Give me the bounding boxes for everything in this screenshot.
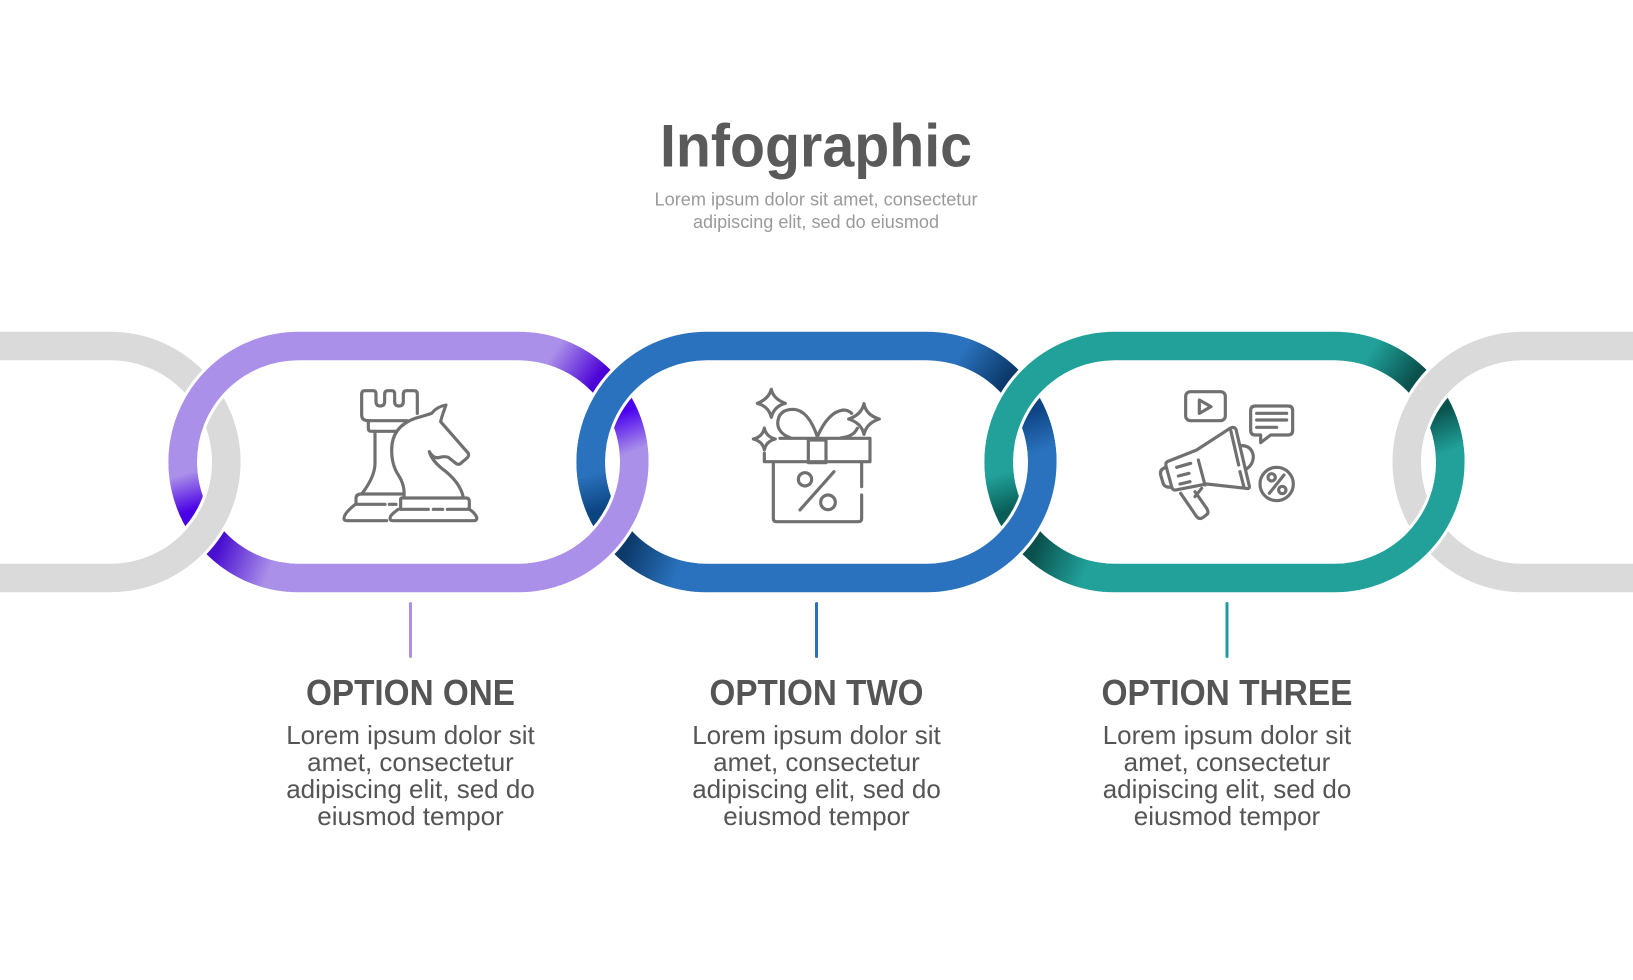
icon: gift box with percent — [753, 389, 879, 522]
description: option one — [286, 720, 536, 831]
description: option two: adipiscing elit, sed do — [692, 774, 941, 804]
icon: chess rook and knight — [344, 391, 477, 521]
description: option one: eiusmod tempor — [317, 801, 504, 831]
connector: option three — [1226, 602, 1228, 658]
link: teal — [999, 346, 1450, 578]
link: grey right — [1407, 346, 1633, 578]
heading: option two: OPTION TWO — [710, 672, 924, 713]
icon: megaphone with media badges — [1160, 392, 1293, 519]
subtitle: Lorem ipsum dolor sit amet, consectetur — [654, 190, 978, 210]
chain of interlocking links — [0, 346, 1633, 578]
overlap: grey over purple at lower crossing — [185, 496, 224, 554]
description: option two: Lorem ipsum dolor sit — [692, 720, 942, 750]
description: option two: eiusmod tempor — [723, 801, 910, 831]
overlap: purple over blue at lower crossing — [556, 464, 648, 586]
title: Infographic — [660, 112, 972, 180]
description: option two — [692, 720, 942, 831]
connector: option two — [815, 602, 818, 658]
description: option one: amet, consectetur — [307, 747, 514, 777]
subtitle: adipiscing elit, sed do eiusmod — [693, 212, 939, 232]
overlap: teal over grey at lower crossing — [1372, 462, 1464, 586]
link: purple — [183, 346, 634, 578]
description: option one: Lorem ipsum dolor sit — [286, 720, 536, 750]
link: blue — [591, 346, 1042, 578]
subtitle — [654, 190, 978, 232]
text block: option two — [692, 672, 942, 831]
overlap: blue over teal at lower crossing — [964, 462, 1057, 586]
description: option three: adipiscing elit, sed do — [1103, 774, 1351, 804]
text block: option three — [1102, 672, 1352, 831]
description: option one: adipiscing elit, sed do — [286, 774, 535, 804]
heading: option one: OPTION ONE — [306, 672, 515, 713]
link: grey left — [0, 346, 226, 578]
description: option three: Lorem ipsum dolor sit — [1103, 720, 1352, 750]
description: option two: amet, consectetur — [713, 747, 920, 777]
connector: option one — [409, 602, 412, 658]
text block: option one — [286, 672, 536, 831]
description: option three: amet, consectetur — [1124, 747, 1331, 777]
description: option three — [1103, 720, 1352, 831]
description: option three: eiusmod tempor — [1134, 801, 1321, 831]
heading: option three: OPTION THREE — [1102, 672, 1352, 713]
